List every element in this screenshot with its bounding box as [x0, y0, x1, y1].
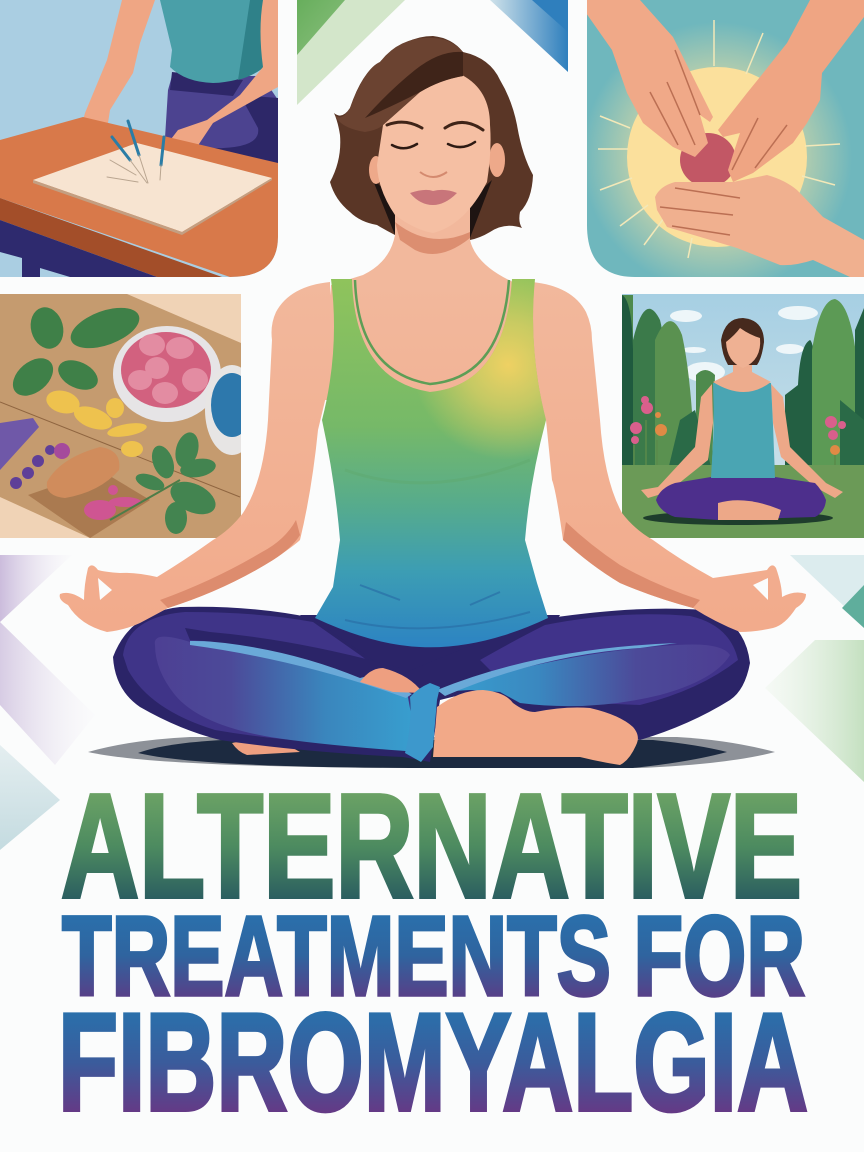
paper sheet	[33, 143, 272, 232]
hand upper left	[586, 0, 713, 157]
purple dots	[10, 443, 70, 489]
pink flower sprig	[84, 480, 180, 520]
ground shadow	[88, 737, 775, 768]
front foot	[433, 690, 638, 765]
clouds	[670, 306, 818, 382]
decorative chevrons: lower right	[765, 555, 864, 782]
lower foot	[232, 735, 300, 755]
closed eyes	[392, 142, 475, 148]
mouth	[410, 190, 457, 205]
decorative chevrons: lower left	[0, 555, 95, 850]
decorative triangles: top centre	[297, 0, 568, 105]
panel: massage hands	[582, 0, 864, 292]
mini feet	[718, 500, 781, 520]
mini arms	[641, 384, 843, 498]
table top	[0, 117, 278, 277]
panel: herbal remedies	[0, 294, 259, 538]
crotch	[300, 615, 560, 700]
right leg	[400, 609, 750, 740]
trouser cuff	[405, 683, 440, 762]
lavender bar	[0, 418, 39, 470]
mini torso	[711, 383, 775, 478]
neck shadow	[395, 222, 470, 254]
ground shadow core	[138, 740, 727, 768]
sun glow	[588, 28, 846, 277]
panel: acupuncture	[0, 0, 278, 277]
grass	[622, 465, 864, 538]
trees	[622, 295, 715, 470]
mini neck	[713, 365, 771, 392]
table front edge	[0, 198, 222, 277]
finger creases	[650, 50, 787, 235]
mini legs	[656, 477, 826, 520]
flowers	[630, 396, 846, 465]
yellow flowers	[44, 387, 148, 457]
dark inner hair	[372, 178, 492, 238]
sun	[627, 67, 807, 247]
mini hair	[721, 318, 764, 365]
eyebrows	[387, 122, 483, 130]
hand upper right	[718, 0, 864, 182]
nose	[420, 172, 447, 177]
head	[330, 36, 533, 254]
person's arms	[84, 0, 278, 144]
bowl of blue	[205, 365, 241, 455]
mini shadow	[643, 513, 833, 525]
sun rays	[598, 20, 840, 258]
needles	[107, 121, 164, 183]
mini face	[726, 328, 760, 368]
back foot	[360, 668, 423, 693]
bowl of pink herbs	[113, 326, 221, 422]
soap shadow	[28, 477, 150, 538]
person's torso	[160, 0, 250, 83]
leaves top	[12, 307, 140, 396]
hair back	[330, 36, 533, 240]
ears	[369, 143, 505, 184]
panel: outdoor meditation	[622, 294, 864, 538]
neck and chest	[320, 205, 548, 400]
face	[377, 75, 491, 233]
hair sweep	[335, 38, 463, 132]
tank top	[315, 279, 548, 647]
finger ring gaps	[98, 578, 112, 600]
title	[58, 764, 808, 1140]
illustration: woman meditating	[60, 36, 806, 768]
soap bar	[47, 447, 119, 498]
table base	[0, 220, 157, 277]
left leg	[113, 607, 440, 762]
arms	[60, 282, 806, 632]
lower hand	[655, 175, 864, 277]
massaged area	[680, 133, 734, 182]
leaves bottom	[134, 430, 221, 534]
hair sweep shadow	[365, 52, 463, 118]
person's pants	[165, 76, 277, 148]
